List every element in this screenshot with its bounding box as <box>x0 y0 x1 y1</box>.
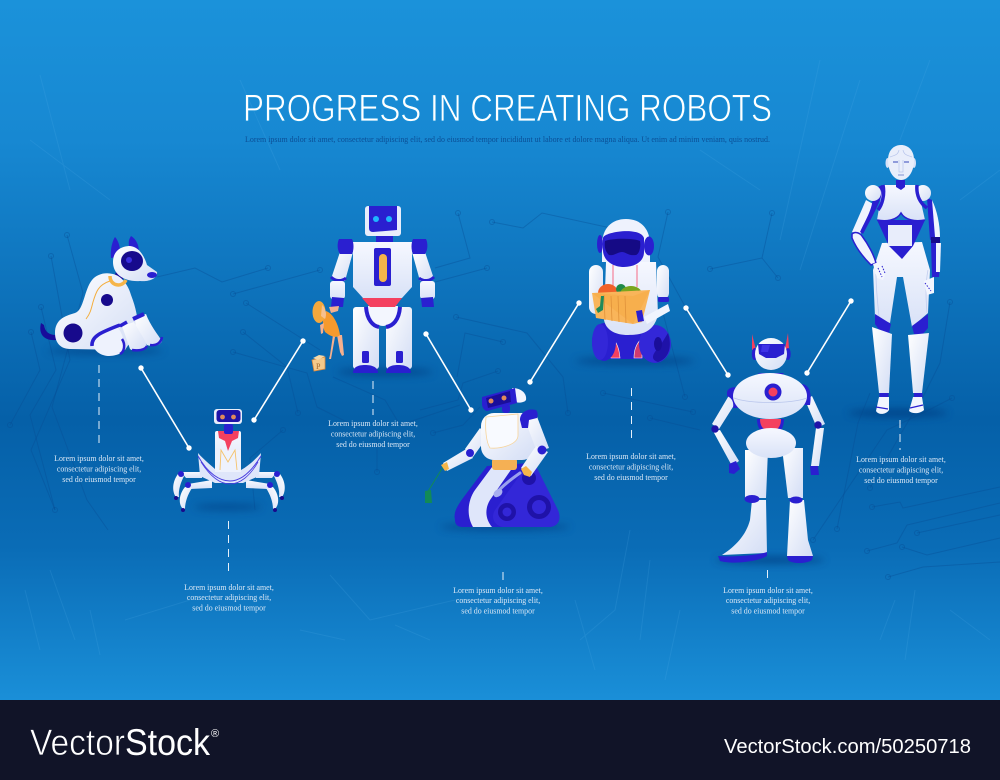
robot dog <box>40 236 163 356</box>
caption: big robot <box>328 419 418 449</box>
tank robot <box>425 388 570 530</box>
caption: wheeled robot: sed do eiusmod tempor <box>594 473 668 482</box>
toy box: P <box>316 362 321 371</box>
caption: big robot: sed do eiusmod tempor <box>336 440 410 449</box>
head <box>752 334 756 350</box>
footer logo: ® <box>211 728 219 740</box>
footer logo <box>30 722 219 763</box>
chest <box>758 373 784 377</box>
connector: humanoid to android <box>804 298 854 376</box>
footer logo: Stock <box>125 722 210 763</box>
track base <box>455 463 559 527</box>
caption: wheeled robot <box>586 452 676 482</box>
torso <box>353 242 412 298</box>
neck and head <box>502 404 510 413</box>
connector: spider to big robot <box>251 338 306 423</box>
caption: spider robot <box>184 583 274 612</box>
caption: big robot: Lorem ipsum dolor sit amet, <box>328 419 418 428</box>
dashed leader: tank robot <box>502 572 504 582</box>
caption: spider robot: sed do eiusmod tempor <box>192 604 266 612</box>
arms <box>711 384 825 475</box>
connector: dog to spider <box>138 365 192 451</box>
toy box <box>312 355 325 371</box>
caption: wheeled robot: Lorem ipsum dolor sit amet, <box>586 452 676 461</box>
legs <box>872 242 930 414</box>
caption: humanoid robot: consectetur adipiscing elit, <box>726 596 810 605</box>
connector: big robot to tank <box>423 331 474 413</box>
right arm <box>525 414 549 452</box>
head <box>896 180 905 190</box>
legs and boots <box>718 448 813 563</box>
android robot <box>848 145 948 417</box>
basket of vegetables <box>592 284 650 324</box>
caption: dog <box>54 454 144 484</box>
caption: tank robot: consectetur adipiscing elit, <box>456 596 540 605</box>
caption: android robot: sed do eiusmod tempor <box>864 476 938 485</box>
girl <box>312 301 344 359</box>
dashed leader: android robot <box>899 420 901 450</box>
caption: wheeled robot: consectetur adipiscing elit, <box>589 462 673 472</box>
arms <box>331 252 353 281</box>
left arm <box>465 428 488 457</box>
footer logo: Vector <box>30 722 125 763</box>
straps <box>613 265 637 287</box>
caption: spider robot: consectetur adipiscing elit, <box>187 593 271 602</box>
spider robot <box>173 409 285 512</box>
caption: tank robot <box>453 586 543 616</box>
wheeled basket robot <box>575 219 695 365</box>
body <box>604 262 658 335</box>
dashed leader: big robot <box>372 381 374 415</box>
footer id: VectorStock.com/50250718 <box>724 736 971 758</box>
torso <box>481 413 535 460</box>
footer bar <box>0 700 1000 780</box>
caption: tank robot: Lorem ipsum dolor sit amet, <box>453 586 543 595</box>
dashed leader: humanoid robot <box>766 570 768 581</box>
caption: humanoid robot: sed do eiusmod tempor <box>731 606 805 616</box>
subtitle: Lorem ipsum dolor sit amet, consectetur adipiscing elit, sed do eiusmod tempor incididunt ut labore et dolore magna aliqua. Ut enim ad minim veniam, quis nostrud. <box>245 135 770 144</box>
dashed leader: wheeled robot <box>630 388 632 444</box>
connector: tank to wheeled robot <box>527 300 582 385</box>
caption: android robot: consectetur adipiscing elit, <box>859 466 943 474</box>
legs <box>353 307 412 373</box>
humanoid robot with antennas <box>711 333 825 564</box>
circuit pattern <box>8 60 1000 680</box>
right arm <box>924 198 941 295</box>
caption: android robot <box>856 455 946 485</box>
caption: humanoid robot <box>723 586 813 616</box>
caption: big robot: consectetur adipiscing elit, <box>331 430 415 438</box>
dashed leader: spider robot <box>228 521 230 575</box>
caption: tank robot: sed do eiusmod tempor <box>461 606 535 616</box>
left arm <box>852 185 885 280</box>
caption: android robot: Lorem ipsum dolor sit amet, <box>856 455 946 464</box>
caption: humanoid robot: Lorem ipsum dolor sit amet, <box>723 586 813 595</box>
big box robot with girl <box>312 206 435 376</box>
waist and hip <box>757 419 784 435</box>
caption: dog: consectetur adipiscing elit, <box>57 464 141 474</box>
collar <box>492 458 517 470</box>
title: PROGRESS IN CREATING ROBOTS <box>243 88 772 130</box>
connector: wheeled robot to humanoid <box>683 305 731 378</box>
wheels and base <box>607 333 643 359</box>
head <box>365 206 401 236</box>
head <box>602 219 650 262</box>
caption: dog: Lorem ipsum dolor sit amet, <box>54 454 144 463</box>
mop <box>427 467 443 493</box>
caption: dog: sed do eiusmod tempor <box>62 475 136 484</box>
torso <box>877 220 925 246</box>
caption: spider robot: Lorem ipsum dolor sit amet, <box>184 583 274 592</box>
dashed leader: dog <box>98 365 100 447</box>
